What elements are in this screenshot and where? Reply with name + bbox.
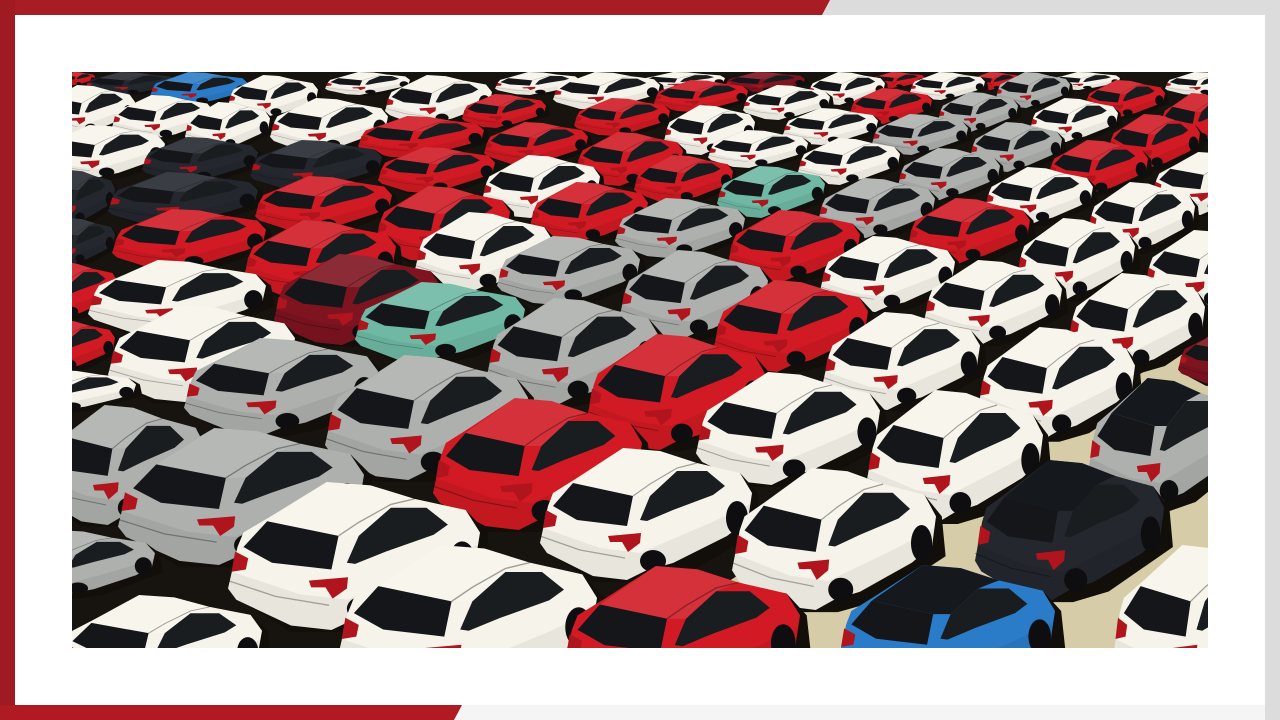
- car: red: [576, 132, 688, 187]
- car: white: [1057, 72, 1120, 90]
- car: dark: [40, 218, 119, 266]
- frame: left red band: [0, 0, 15, 720]
- car: white: [924, 260, 1069, 346]
- car: white: [338, 545, 609, 702]
- car: red: [850, 88, 936, 125]
- car: white: [1088, 182, 1200, 254]
- car: white: [385, 75, 492, 120]
- car: silver: [40, 405, 213, 527]
- car: red: [714, 280, 875, 373]
- frame: bottom red band: [0, 705, 462, 720]
- car: dark with black roof: [975, 460, 1173, 602]
- car: white: [910, 72, 989, 100]
- car: white: [808, 72, 889, 106]
- car: silver: [487, 298, 666, 407]
- car: white: [228, 75, 318, 116]
- car: white: [228, 482, 492, 632]
- car: red: [874, 72, 925, 88]
- car: silver: [184, 338, 387, 436]
- car: red: [484, 122, 593, 166]
- car: white: [798, 138, 905, 186]
- car: red: [72, 72, 95, 85]
- car: red: [654, 80, 752, 112]
- car: red: [358, 116, 490, 159]
- car: red: [908, 198, 1036, 265]
- car: silver: [497, 236, 647, 306]
- car: white: [743, 85, 834, 121]
- car: white: [978, 327, 1142, 442]
- car: white: [823, 312, 987, 411]
- car: red: [376, 186, 516, 263]
- car: white: [482, 155, 606, 219]
- car: silver: [620, 250, 775, 341]
- car: red: [634, 155, 738, 204]
- car: white: [708, 130, 813, 169]
- car: white: [1017, 218, 1141, 301]
- car: white: [696, 372, 889, 487]
- car: red: [1110, 114, 1203, 167]
- photo: parking lot full of cars: [72, 72, 1208, 648]
- frame: top gray band: [820, 0, 1280, 15]
- car: red: [20, 320, 119, 373]
- car: red: [433, 398, 652, 532]
- car: maroon: [725, 72, 809, 92]
- car: dark: [40, 170, 119, 226]
- car: silver with dark roof: [1088, 378, 1247, 512]
- car: white: [108, 305, 304, 403]
- car: red: [728, 210, 866, 283]
- car: white: [732, 468, 946, 612]
- photo ground: sunlit pavement: [700, 330, 1208, 648]
- car: silver: [818, 178, 941, 239]
- car: silver: [0, 530, 163, 599]
- car: white: [1030, 98, 1122, 143]
- car: white: [270, 98, 391, 146]
- photo ground: shaded: [72, 72, 1208, 648]
- car: maroon: [274, 254, 448, 346]
- frame: bottom light band: [455, 705, 1265, 720]
- car: white: [553, 72, 665, 111]
- car: white: [112, 95, 210, 138]
- car: white: [88, 260, 274, 336]
- car: silver: [615, 198, 751, 259]
- car: red: [255, 176, 398, 233]
- car: red: [1086, 80, 1165, 117]
- car: dark: [142, 137, 263, 183]
- car: dark: [250, 140, 388, 191]
- car: red: [112, 209, 273, 271]
- car: white: [783, 108, 882, 146]
- car: white: [72, 85, 135, 133]
- car: teal: [717, 166, 830, 219]
- car: red: [1048, 140, 1153, 196]
- car: blue: [150, 72, 248, 103]
- car: white: [1145, 230, 1276, 311]
- car: teal: [355, 282, 533, 363]
- car: silver: [118, 428, 376, 567]
- car: white: [664, 105, 759, 156]
- car: red: [563, 566, 811, 713]
- car: red: [574, 98, 675, 137]
- car: silver: [938, 92, 1022, 133]
- frame: top red band: [0, 0, 830, 15]
- car: silver: [970, 122, 1066, 173]
- car: white: [40, 125, 171, 181]
- car: white: [1113, 545, 1280, 702]
- car: white: [540, 448, 762, 582]
- car: white: [185, 102, 270, 144]
- car: white: [866, 390, 1051, 524]
- car: red: [1163, 93, 1208, 142]
- car: white: [820, 236, 961, 313]
- car: white: [415, 212, 558, 293]
- car: red: [587, 334, 773, 452]
- car: red: [530, 182, 654, 244]
- car: red: [976, 72, 1018, 90]
- car: silver: [872, 114, 973, 156]
- car: white: [495, 72, 584, 95]
- car: red: [378, 147, 501, 194]
- car: blue with black roof: [838, 565, 1065, 702]
- car: silver: [996, 72, 1073, 109]
- car: white: [1068, 273, 1211, 374]
- car: white: [1165, 72, 1208, 95]
- frame: right gray band: [1265, 0, 1280, 720]
- car: red: [20, 262, 123, 321]
- car: white: [60, 595, 272, 702]
- car: white: [645, 72, 725, 90]
- car: white: [325, 72, 414, 95]
- car: dark: [108, 172, 265, 227]
- car: white: [1152, 152, 1276, 216]
- car: red: [244, 220, 403, 299]
- car: silver: [898, 148, 1005, 201]
- car: silver: [325, 355, 538, 482]
- car: red: [462, 94, 550, 129]
- car: maroon: [1178, 330, 1280, 386]
- car: white: [0, 370, 142, 413]
- car: dark: [86, 72, 172, 94]
- car: white: [985, 167, 1098, 226]
